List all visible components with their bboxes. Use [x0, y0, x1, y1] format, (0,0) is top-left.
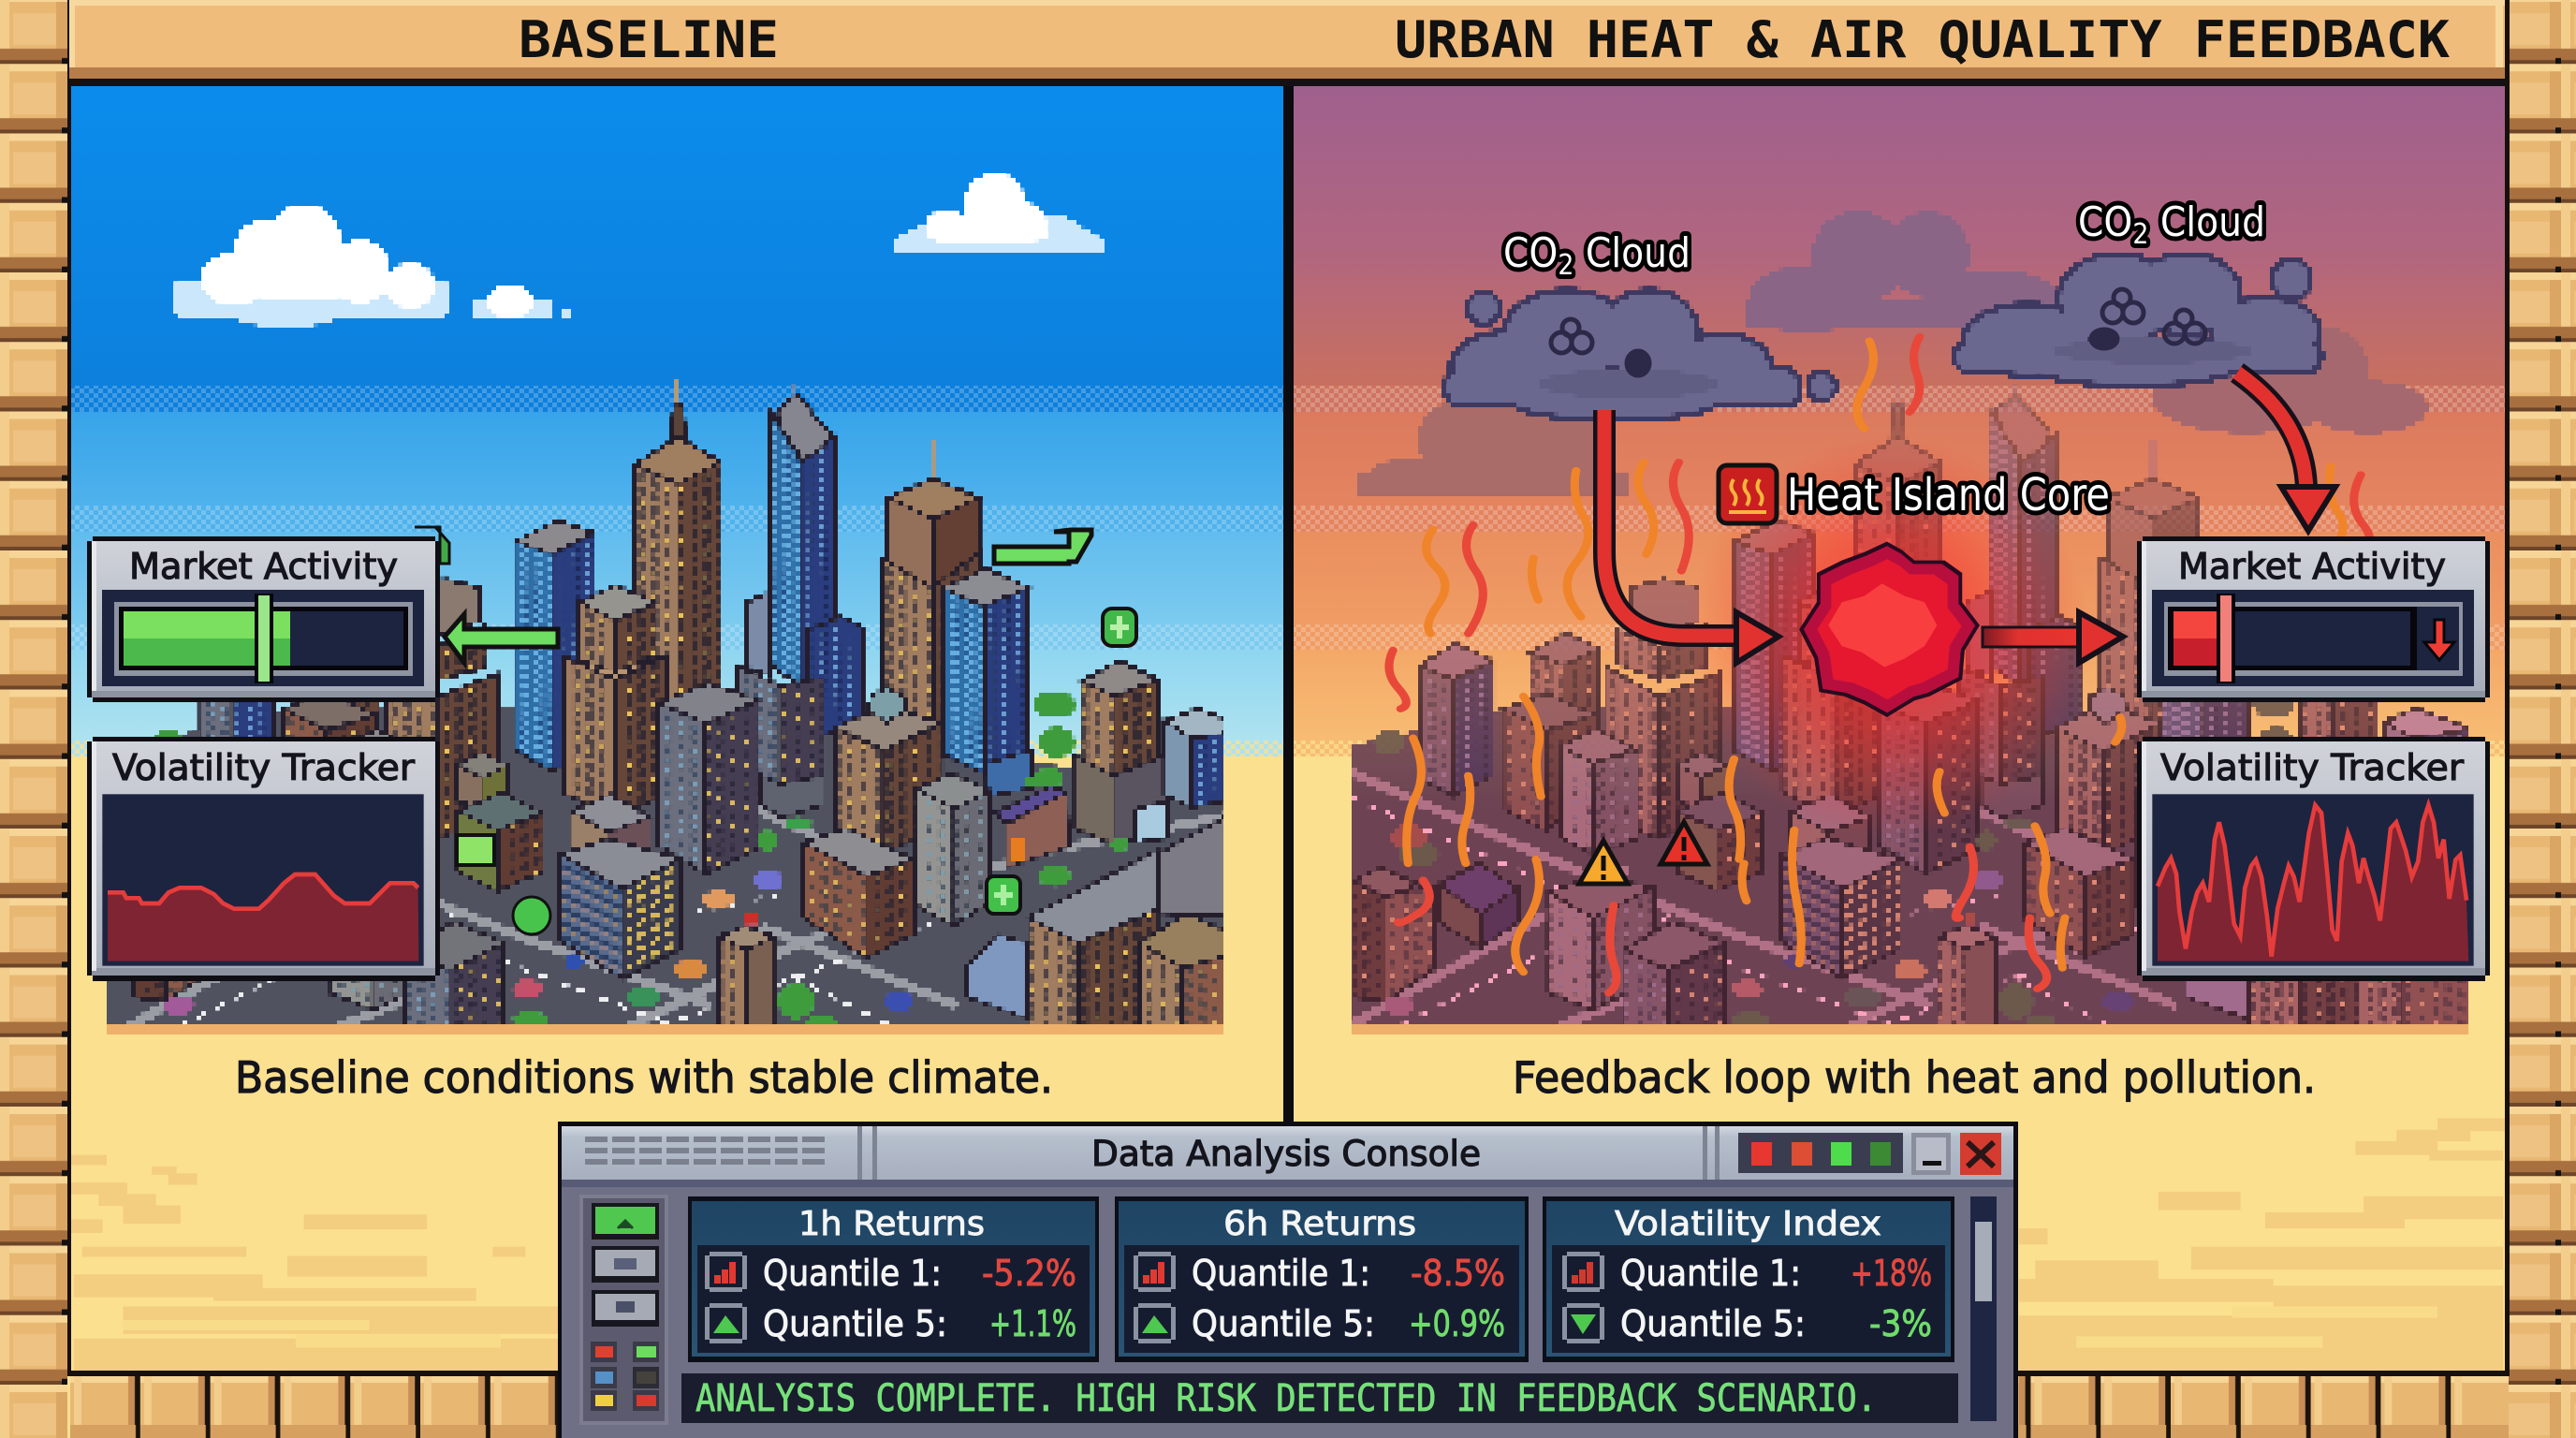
- card: volatility index: Volatility Index: [1615, 1205, 1881, 1243]
- label: CO2 cloud left: CO: [1503, 229, 1564, 277]
- icon: down arrow: [2424, 620, 2454, 660]
- city: baseline: [104, 381, 1263, 1031]
- co2 clouds: [1448, 257, 2319, 418]
- label: CO2 cloud left: Cloud: [1573, 229, 1690, 277]
- data analysis console: [558, 1122, 2018, 1438]
- panel: feedback scene: [1294, 86, 2505, 1034]
- card: 1h returns: 1h Returns: [798, 1205, 985, 1243]
- row: quantile 1: [1562, 1252, 1932, 1294]
- label: Market Activity: [129, 546, 398, 587]
- sand texture left: [70, 1155, 558, 1371]
- green activity arrow: [445, 614, 558, 663]
- row: quantile 5: [705, 1303, 1076, 1344]
- floor bricks left: [70, 1371, 562, 1438]
- row: quantile 1: -5.2%: [982, 1253, 1076, 1294]
- art edge: [107, 1024, 1223, 1034]
- arrow: cloud to core: [1604, 410, 1778, 663]
- clouds: [172, 172, 1105, 328]
- row: quantile 1: Quantile 1:: [1192, 1253, 1370, 1294]
- row: quantile 5: [1562, 1303, 1932, 1344]
- sand texture right: [2019, 1118, 2508, 1371]
- art edge: [1352, 1024, 2468, 1034]
- card: volatility index: [1543, 1196, 1954, 1362]
- mode buttons: [592, 1203, 659, 1240]
- market activity panel: baseline: [87, 536, 440, 702]
- background smoke clouds: [1358, 211, 2428, 498]
- panel: baseline scene: [69, 86, 1283, 1034]
- card: 1h returns: [688, 1196, 1099, 1362]
- plus badge top: [1103, 609, 1136, 646]
- volatility tracker panel: feedback: [2137, 737, 2490, 981]
- row: quantile 5: Quantile 5:: [1192, 1303, 1375, 1344]
- title: feedback: URBAN HEAT & AIR QUALITY FEEDBACK: [1395, 10, 2451, 69]
- label: CO2 cloud right: CO: [2078, 198, 2139, 246]
- row: quantile 5: +1.1%: [989, 1303, 1076, 1344]
- row: quantile 5: Quantile 5:: [1620, 1303, 1806, 1344]
- activity meter: [2152, 590, 2474, 686]
- row: quantile 5: [1134, 1303, 1505, 1344]
- plus badge lower: [987, 876, 1020, 914]
- button column: [581, 1196, 666, 1423]
- label: CO2 cloud left: 2: [1558, 249, 1573, 282]
- city: feedback: [1324, 381, 2482, 1031]
- green block marker: [457, 835, 494, 865]
- flames: [1389, 337, 2371, 993]
- row: quantile 1: +18%: [1851, 1253, 1932, 1294]
- row: quantile 1: -8.5%: [1411, 1253, 1505, 1294]
- arrow: core to market: [1983, 612, 2123, 663]
- header banner: [69, 0, 2505, 86]
- close button: [1960, 1133, 2001, 1175]
- row: quantile 1: [705, 1252, 1076, 1294]
- indicator lights: [591, 1342, 617, 1362]
- scrollbar: [1970, 1196, 1997, 1421]
- card: 6h returns: [1115, 1196, 1529, 1362]
- sky: [1294, 86, 2505, 756]
- heat island core: [1799, 542, 1980, 717]
- row: quantile 5: -3%: [1869, 1303, 1932, 1344]
- caption: feedback: Feedback loop with heat and pollution.: [1513, 1052, 2316, 1103]
- card: 6h returns: 6h Returns: [1223, 1205, 1416, 1243]
- round marker: [513, 897, 550, 934]
- right brick wall: [2505, 0, 2576, 1438]
- title bar: [562, 1126, 2013, 1187]
- status LEDs: [1738, 1133, 1903, 1173]
- row: quantile 5: Quantile 5:: [763, 1303, 947, 1344]
- row: quantile 1: Quantile 1:: [763, 1253, 942, 1294]
- panel divider: [1283, 82, 1294, 1123]
- arrow: cloud to market: [2237, 373, 2335, 531]
- volatility chart: [2152, 794, 2474, 966]
- row: quantile 1: [1134, 1252, 1505, 1294]
- green markers: [415, 527, 1136, 934]
- left brick wall: [0, 0, 71, 1438]
- label: CO2 cloud right: Cloud: [2148, 198, 2265, 246]
- warning triangle yellow: [1579, 841, 1628, 884]
- vent lines: [585, 1139, 827, 1162]
- label: Volatility Tracker: [112, 747, 415, 788]
- icon: heat island: [1719, 465, 1777, 523]
- minimize button: [1911, 1133, 1951, 1175]
- caption: baseline: Baseline conditions with stable climate.: [235, 1052, 1053, 1103]
- volatility tracker panel: baseline: [87, 737, 440, 981]
- icon: biohazard symbols: [1551, 289, 2205, 375]
- heat glow: [1703, 453, 2076, 828]
- sky: [69, 86, 1283, 756]
- label: Market Activity: [2178, 546, 2446, 587]
- label: heat island core: Heat Island Core: [1787, 469, 2110, 521]
- status bar: ANALYSIS COMPLETE. HIGH RISK DETECTED IN FEEDBACK SCENARIO.: [695, 1377, 1877, 1420]
- floor bricks right: [2014, 1371, 2509, 1438]
- label: Volatility Tracker: [2160, 747, 2464, 788]
- row: quantile 5: +0.9%: [1409, 1303, 1505, 1344]
- volatility chart: [102, 794, 424, 966]
- warning triangle red: [1661, 822, 1707, 864]
- market activity panel: feedback: [2137, 536, 2490, 702]
- green corner marker: [415, 527, 449, 564]
- console title: Data Analysis Console: [1091, 1134, 1481, 1174]
- title: baseline: BASELINE: [519, 10, 779, 69]
- activity meter: [102, 590, 424, 686]
- row: quantile 1: Quantile 1:: [1620, 1253, 1801, 1294]
- label: CO2 cloud right: 2: [2132, 218, 2148, 251]
- green bent arrow: [994, 530, 1091, 564]
